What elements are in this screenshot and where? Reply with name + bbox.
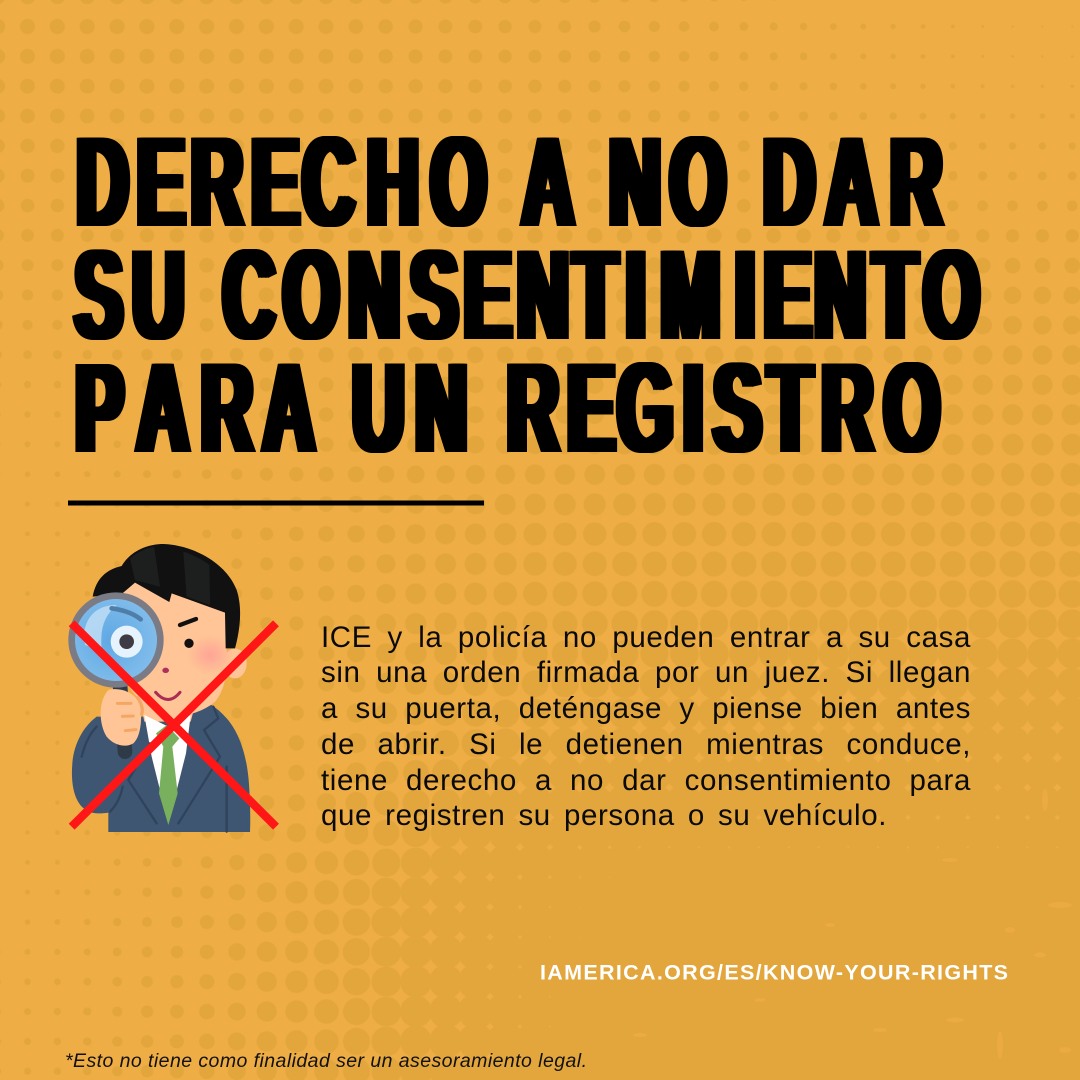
magnifier (72, 596, 160, 684)
cheek blush (187, 635, 233, 675)
body text: sin una orden firmada por un juez. Si llegan (321, 656, 971, 689)
magnifier handle (120, 685, 125, 752)
body text: a su puerta, deténgase y piense bien antes (321, 692, 971, 725)
hair (93, 544, 240, 648)
eyebrow and eye (180, 619, 196, 625)
title: PARA UN REGISTRO (71, 336, 935, 479)
tie (156, 725, 179, 825)
red cross (72, 623, 276, 827)
title (70, 110, 975, 479)
body text (321, 620, 971, 832)
face (122, 580, 227, 716)
ear (223, 648, 247, 678)
icon: man looking through magnifying glass, crossed out (72, 544, 276, 832)
body text: tiene derecho a no dar consentimiento para (321, 764, 971, 797)
body text: de abrir. Si le detienen mientras conduce, (321, 728, 971, 761)
hand (101, 689, 141, 746)
shirt (144, 715, 191, 823)
website link: IAMERICA.ORG/ES/KNOW-YOUR-RIGHTS (540, 960, 1008, 984)
title: DERECHO A NO DAR (72, 110, 937, 253)
body text: que registren su persona o su vehículo. (321, 799, 887, 832)
nose and mouth (162, 668, 169, 673)
heading divider rule (68, 500, 484, 506)
lapels and jacket creases (82, 707, 227, 832)
title: SU CONSENTIMIENTO (70, 223, 975, 366)
legal disclaimer: *Esto no tiene como finalidad ser un asesoramiento legal. (65, 1050, 587, 1072)
body text: ICE y la policía no pueden entrar a su casa (321, 620, 971, 654)
jacket (72, 705, 250, 832)
neck (137, 687, 193, 722)
